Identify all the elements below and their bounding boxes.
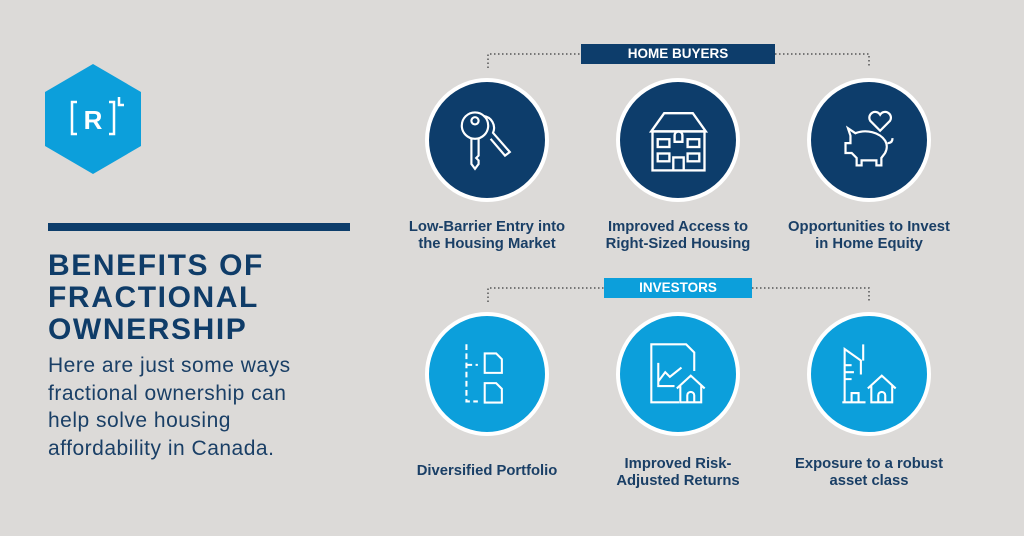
label: Opportunities to Invest (788, 219, 950, 235)
circle: portfolio (425, 312, 549, 436)
tag: investors (604, 278, 752, 298)
label (409, 219, 565, 252)
tag: home buyers: HOME BUYERS (628, 46, 728, 61)
subtitle text: affordability in Canada. (48, 436, 274, 460)
subtitle text: help solve housing (48, 409, 231, 432)
circle: house (616, 78, 740, 202)
label: Improved Risk- (625, 456, 731, 472)
subtitle text (48, 354, 291, 460)
circle: piggy (807, 78, 931, 202)
circle: asset class (807, 312, 931, 436)
tag: home buyers (581, 44, 775, 64)
title: BENEFITS OF (48, 249, 264, 282)
label: Diversified Portfolio (417, 463, 557, 479)
logo hexagon: R (84, 105, 103, 135)
label: Right-Sized Housing (606, 236, 750, 252)
subtitle text: fractional ownership can (48, 382, 286, 404)
label: Improved Access to (608, 219, 748, 235)
title (48, 249, 264, 346)
title: FRACTIONAL (48, 281, 259, 314)
circle: keys (425, 78, 549, 202)
label: Exposure to a robust (795, 456, 943, 472)
label: asset class (830, 473, 908, 489)
subtitle text: Here are just some ways (48, 354, 291, 377)
label (788, 219, 950, 252)
circle: returns (616, 312, 740, 436)
title: OWNERSHIP (48, 313, 247, 346)
label: Adjusted Returns (616, 473, 740, 489)
logo hexagon (45, 64, 141, 174)
label (795, 456, 943, 489)
divider bar (48, 223, 350, 231)
label (606, 219, 750, 252)
label (616, 456, 740, 489)
label: in Home Equity (815, 236, 923, 252)
tag: investors: INVESTORS (639, 280, 717, 295)
label: the Housing Market (418, 236, 556, 252)
label: Low-Barrier Entry into (409, 219, 565, 235)
